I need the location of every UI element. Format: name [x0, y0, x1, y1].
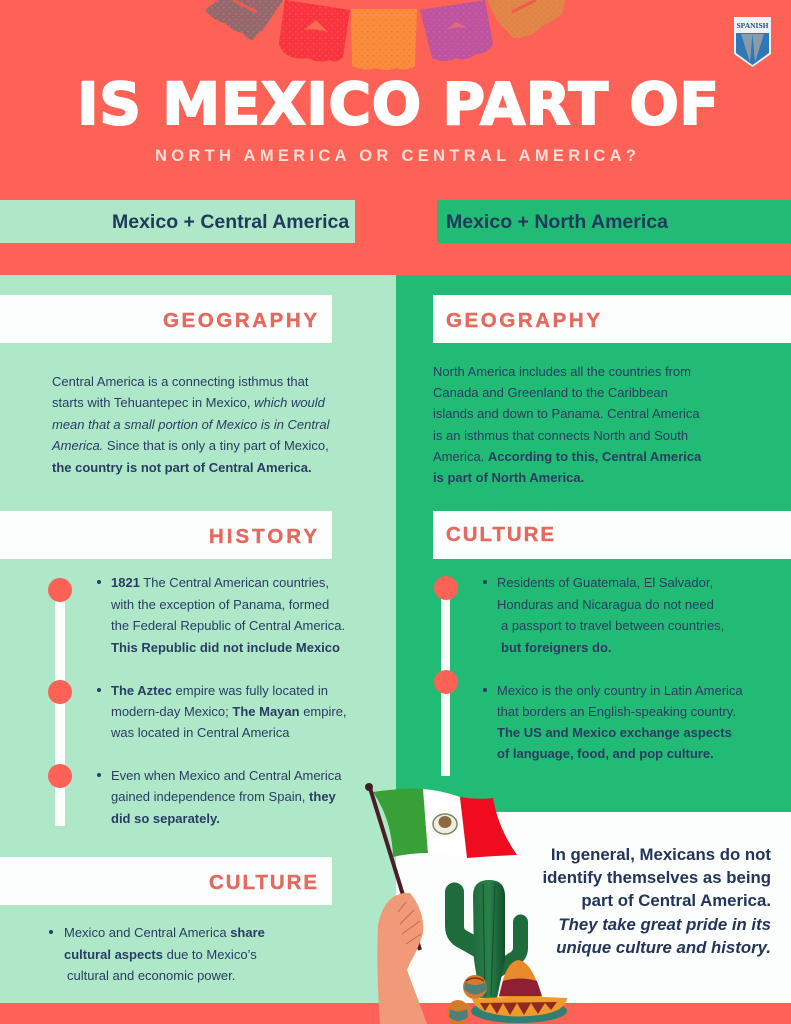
logo: Spanish shield: SPANISH — [737, 21, 769, 30]
text: culture left: Mexico and Central America share — [64, 925, 265, 940]
sombrero brim — [471, 997, 567, 1023]
flag: coat of arms — [433, 814, 457, 834]
text: geography right: America. According to this, Central America — [433, 449, 702, 464]
text: geography right: islands and down to Panama. Central America — [433, 406, 700, 421]
text: conclusion: part of Central America. — [581, 891, 771, 910]
flag: orange — [351, 9, 417, 70]
heading: culture left: CULTURE — [209, 871, 317, 894]
text: culture left — [49, 925, 265, 983]
flag: green stripe — [373, 789, 428, 857]
heading: geography left: GEOGRAPHY — [163, 309, 317, 332]
flag: ochre — [487, 0, 565, 38]
panel: North America column — [396, 275, 791, 812]
text: conclusion: identify themselves as being — [542, 868, 771, 887]
text: history item Aztec: The Aztec empire was fully located in — [111, 683, 328, 698]
text: history item 1821 — [97, 575, 345, 655]
text: geography right: is part of North America. — [433, 470, 584, 485]
text: conclusion: unique culture and history. — [556, 938, 771, 957]
text: history item 1821: with the exception of Panama, formed — [110, 597, 329, 612]
text: history item Aztec — [97, 683, 347, 740]
tab: Mexico + Central America: Mexico + Central America — [112, 211, 349, 233]
text: geography left: the country is not part of Central America. — [52, 460, 312, 475]
text: history item independence: did so separately. — [111, 811, 220, 826]
flag: grey — [205, 0, 283, 40]
text: geography left: Central America is a connecting isthmus that — [52, 374, 309, 389]
text: culture item borders: of language, food, and pop culture. — [497, 746, 714, 761]
panel: conclusion — [396, 812, 791, 1003]
maraca lower — [447, 1000, 469, 1024]
sombrero band — [499, 978, 542, 996]
text: culture item borders: Mexico is the only country in Latin America — [497, 683, 743, 698]
heading: history: HISTORY — [209, 525, 317, 548]
papel picado banner — [205, 0, 565, 70]
text: geography right: Canada and Greenland to the Caribbean — [433, 385, 668, 400]
text: geography left — [51, 374, 331, 475]
text: conclusion — [542, 845, 771, 957]
timeline: history — [48, 578, 72, 826]
subtitle: NORTH AMERICA OR CENTRAL AMERICA? — [155, 147, 636, 165]
text: history item independence: Even when Mexico and Central America — [111, 768, 342, 783]
text: culture item passport: Honduras and Nicaragua do not need — [497, 597, 714, 612]
text: conclusion: They take great pride in its — [558, 915, 771, 934]
hand — [377, 893, 427, 1024]
heading: geography right — [433, 295, 791, 343]
heading: geography left — [0, 295, 332, 343]
tab: Mexico + North America: Mexico + North America — [446, 211, 668, 233]
heading: culture right — [433, 511, 791, 559]
title: IS MEXICO PART OF — [77, 70, 719, 138]
text: culture item passport: a passport to travel between countries, — [501, 618, 724, 633]
flag: purple — [420, 0, 493, 61]
text: history item 1821: the Federal Republic of Central America. — [111, 618, 345, 633]
text: culture item passport: but foreigners do. — [501, 640, 612, 655]
fingers — [398, 902, 421, 944]
text: history item Aztec: was located in Central America — [110, 725, 290, 740]
text: geography right — [433, 364, 702, 485]
text: culture item borders — [483, 683, 743, 761]
flag: white stripe — [423, 789, 467, 857]
text: conclusion: In general, Mexicans do not — [551, 845, 771, 864]
text: culture item passport: Residents of Guatemala, El Salvador, — [497, 575, 713, 590]
icon: cactus — [454, 880, 520, 998]
text: culture item borders: that borders an English-speaking country. — [497, 704, 736, 719]
text: culture item borders: The US and Mexico exchange aspects — [497, 725, 732, 740]
text: history item independence — [97, 768, 342, 826]
tab: Mexico + Central America — [0, 200, 355, 243]
text: geography right: North America includes all the countries from — [433, 364, 691, 379]
text: geography left: starts with Tehuantepec in Mexico, which would — [52, 395, 326, 410]
icon: sombrero and maracas — [447, 960, 567, 1024]
flag: red stripe — [460, 797, 517, 858]
text: history item 1821: This Republic did not include Mexico — [111, 640, 340, 655]
text: history item independence: gained independence from Spain, they — [111, 789, 337, 804]
heading: history — [0, 511, 332, 559]
text: geography left: America. Since that is only a tiny part of Mexico, — [51, 438, 329, 453]
logo: Spanish shield — [734, 17, 771, 67]
flag: red — [279, 0, 350, 62]
text: culture left: cultural and economic power. — [67, 968, 235, 983]
heading: culture right: CULTURE — [446, 523, 554, 546]
text: culture left: cultural aspects due to Mexico’s — [64, 947, 257, 962]
sombrero crown — [499, 960, 542, 998]
bottom strip — [0, 1003, 791, 1024]
heading: geography right: GEOGRAPHY — [446, 309, 600, 332]
icon: Mexican flag in hand — [365, 783, 517, 1024]
panel: Central America column — [0, 275, 396, 1003]
tab: Mexico + North America — [437, 200, 791, 243]
text: geography right: is an isthmus that connects North and South — [433, 428, 688, 443]
text: geography left: mean that a small portion of Mexico is in Central — [52, 417, 331, 432]
text: history item Aztec: modern-day Mexico; The Mayan empire, — [111, 704, 347, 719]
text: history item 1821: 1821 The Central American countries, — [111, 575, 329, 590]
text: culture item passport — [483, 575, 724, 655]
timeline: culture — [434, 576, 458, 776]
maraca upper — [463, 975, 487, 999]
heading: culture left — [0, 857, 332, 905]
flag pole — [365, 783, 420, 950]
